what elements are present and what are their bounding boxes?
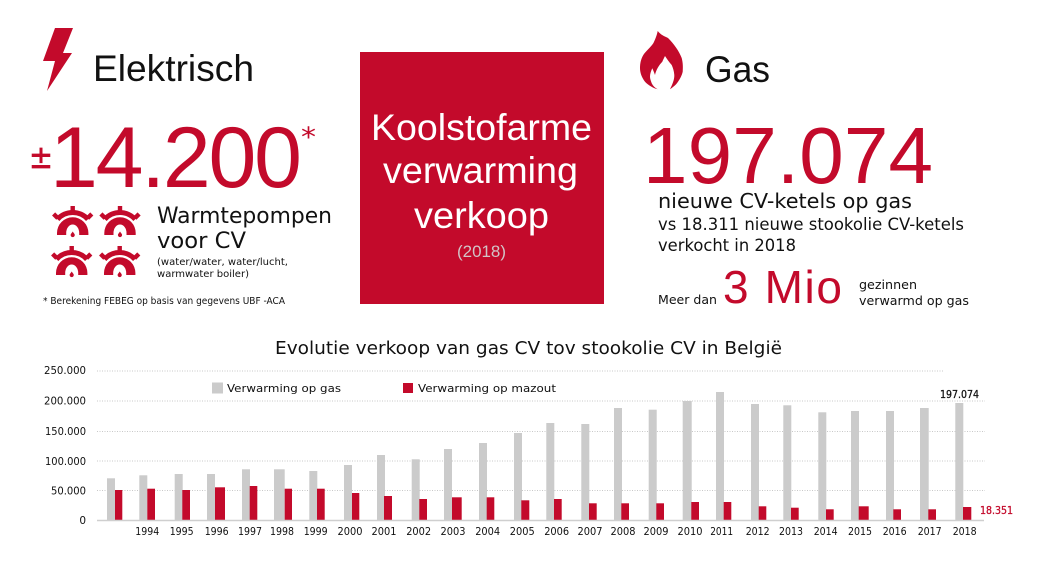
y axis labels: 50.000 bbox=[51, 486, 86, 498]
heading: Gas: Gas bbox=[705, 49, 770, 90]
text: Warmtepompen voor CV bbox=[157, 204, 332, 280]
big number: 14.200: ± bbox=[29, 138, 53, 176]
x axis year labels: 2003 bbox=[440, 526, 466, 538]
x axis year labels: 2014 bbox=[814, 526, 838, 538]
y axis labels: 0 bbox=[79, 515, 86, 527]
x axis year labels: 1994 bbox=[135, 526, 160, 538]
x axis year labels: 1995 bbox=[170, 526, 194, 538]
panel: elektrisch bbox=[29, 28, 332, 307]
x axis year labels: 2006 bbox=[544, 526, 569, 538]
legend: Verwarming op gas bbox=[227, 382, 341, 395]
x axis year labels: 2000 bbox=[338, 526, 362, 538]
y axis labels: 150.000 bbox=[45, 426, 86, 438]
text: Warmtepompen voor CV: Warmtepompen bbox=[157, 204, 332, 229]
x axis year labels: 2018 bbox=[953, 526, 977, 538]
icons: four heat pumps bbox=[51, 206, 141, 277]
text: nieuwe CV-ketels: nieuwe CV-ketels op gas bbox=[658, 189, 912, 213]
legend bbox=[212, 382, 557, 395]
x axis year labels: 2009 bbox=[644, 526, 668, 538]
stat: 3 Mio households: verwarmd op gas bbox=[859, 294, 969, 308]
x axis year labels: 2004 bbox=[475, 526, 500, 538]
x axis year labels: 2005 bbox=[510, 526, 535, 538]
big number: 197.074: 197.074 bbox=[643, 111, 933, 200]
text: nieuwe CV-ketels: vs 18.311 nieuwe stookolie CV-ketels bbox=[658, 215, 964, 234]
x axis year labels: 1998 bbox=[270, 526, 294, 538]
text: Warmtepompen voor CV: (water/water, water/lucht, bbox=[157, 257, 288, 268]
x axis year labels: 2013 bbox=[779, 526, 803, 538]
panel: central title bbox=[360, 52, 604, 304]
x axis year labels: 2010 bbox=[678, 526, 702, 538]
x axis year labels: 2012 bbox=[746, 526, 770, 538]
bars: gas heating bbox=[107, 392, 963, 520]
panel: central title: Koolstofarme bbox=[371, 107, 592, 148]
y axis labels: 100.000 bbox=[45, 456, 86, 468]
y axis labels: 200.000 bbox=[44, 396, 86, 408]
text: Warmtepompen voor CV: voor CV bbox=[157, 229, 246, 254]
panel: gas bbox=[640, 31, 969, 313]
chart title: Evolutie verkoop van gas CV tov stookolie CV in België bbox=[275, 339, 782, 359]
x axis year labels: 2017 bbox=[918, 526, 942, 538]
x axis year labels: 2001 bbox=[372, 526, 396, 538]
x axis year labels: 1997 bbox=[238, 526, 262, 538]
y axis labels: 250.000 bbox=[44, 365, 86, 377]
footnote: * Berekening FEBEG op basis van gegevens UBF -ACA bbox=[43, 296, 285, 307]
stat: 3 Mio households: gezinnen bbox=[859, 278, 917, 292]
panel: central title: verwarming bbox=[383, 150, 578, 191]
x axis line bbox=[97, 520, 984, 522]
y axis labels bbox=[44, 365, 86, 527]
x axis year labels: 2002 bbox=[406, 526, 431, 538]
icon: lightning bolt bbox=[43, 28, 73, 91]
stat: 3 Mio households bbox=[658, 261, 969, 313]
legend: Verwarming op mazout bbox=[418, 382, 557, 395]
x axis year labels: 2008 bbox=[610, 526, 636, 538]
text: Warmtepompen voor CV: warmwater boiler) bbox=[157, 269, 249, 280]
big number: 14.200: 14.200 bbox=[50, 110, 302, 206]
x axis year labels: 2011 bbox=[710, 526, 733, 538]
heading: Elektrisch: Elektrisch bbox=[93, 48, 254, 89]
bar chart: sales evolution bbox=[44, 365, 1013, 538]
x axis year labels: 2007 bbox=[578, 526, 602, 538]
x axis year labels: 1999 bbox=[304, 526, 328, 538]
text: nieuwe CV-ketels: verkocht in 2018 bbox=[658, 236, 796, 255]
x axis year labels: 2016 bbox=[883, 526, 907, 538]
value label: 197.074: 197.074 bbox=[940, 389, 979, 401]
panel: central title: verkoop bbox=[414, 195, 549, 236]
text: nieuwe CV-ketels bbox=[658, 189, 964, 255]
stat: 3 Mio households: 3 Mio bbox=[723, 261, 842, 313]
value label: 18.351: 18.351 bbox=[980, 505, 1013, 517]
panel: central title: (2018) bbox=[457, 242, 506, 261]
x axis year labels: 1996 bbox=[205, 526, 229, 538]
bars: oil heating bbox=[115, 486, 971, 520]
x axis year labels bbox=[135, 526, 977, 538]
stat: 3 Mio households: Meer dan bbox=[658, 293, 717, 307]
icon: flame bbox=[640, 31, 683, 89]
big number: 14.200: * bbox=[301, 122, 316, 153]
x axis year labels: 2015 bbox=[848, 526, 872, 538]
